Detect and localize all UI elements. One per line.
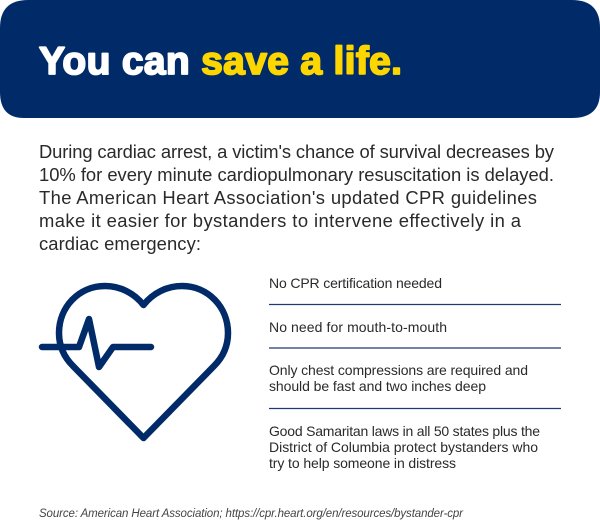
intro paragraph: cardiac emergency: (39, 233, 201, 254)
list item: chest compressions (269, 362, 528, 394)
list item: Good Samaritan laws: Good Samaritan laws in all 50 states plus the (269, 423, 540, 439)
list item: Good Samaritan laws (269, 423, 540, 471)
intro paragraph: 10% for every minute cardiopulmonary resuscitation is delayed. (39, 164, 554, 185)
source note: Source: American Heart Association; https://cpr.heart.org/en/resources/bystander-cpr (39, 508, 464, 520)
intro paragraph: During cardiac arrest, a victim's chance of survival decreases by (39, 141, 555, 162)
list item: chest compressions: should be fast and two inches deep (269, 378, 486, 394)
icon: heart with pulse line (42, 286, 228, 438)
intro paragraph: make it easier for bystanders to intervene effectively in a (39, 210, 522, 231)
list item: Good Samaritan laws: District of Columbia protect bystanders who (269, 439, 538, 455)
list item: no certification: No CPR certification needed (269, 275, 442, 291)
intro paragraph: The American Heart Association's updated CPR guidelines (39, 187, 537, 208)
list item: chest compressions: Only chest compressions are required and (269, 362, 528, 378)
list item: no mouth-to-mouth: No need for mouth-to-mouth (269, 319, 447, 335)
header banner (0, 0, 600, 118)
list item: Good Samaritan laws: try to help someone in distress (269, 455, 456, 471)
intro paragraph (39, 141, 555, 254)
title: You can save a life. (39, 40, 402, 83)
